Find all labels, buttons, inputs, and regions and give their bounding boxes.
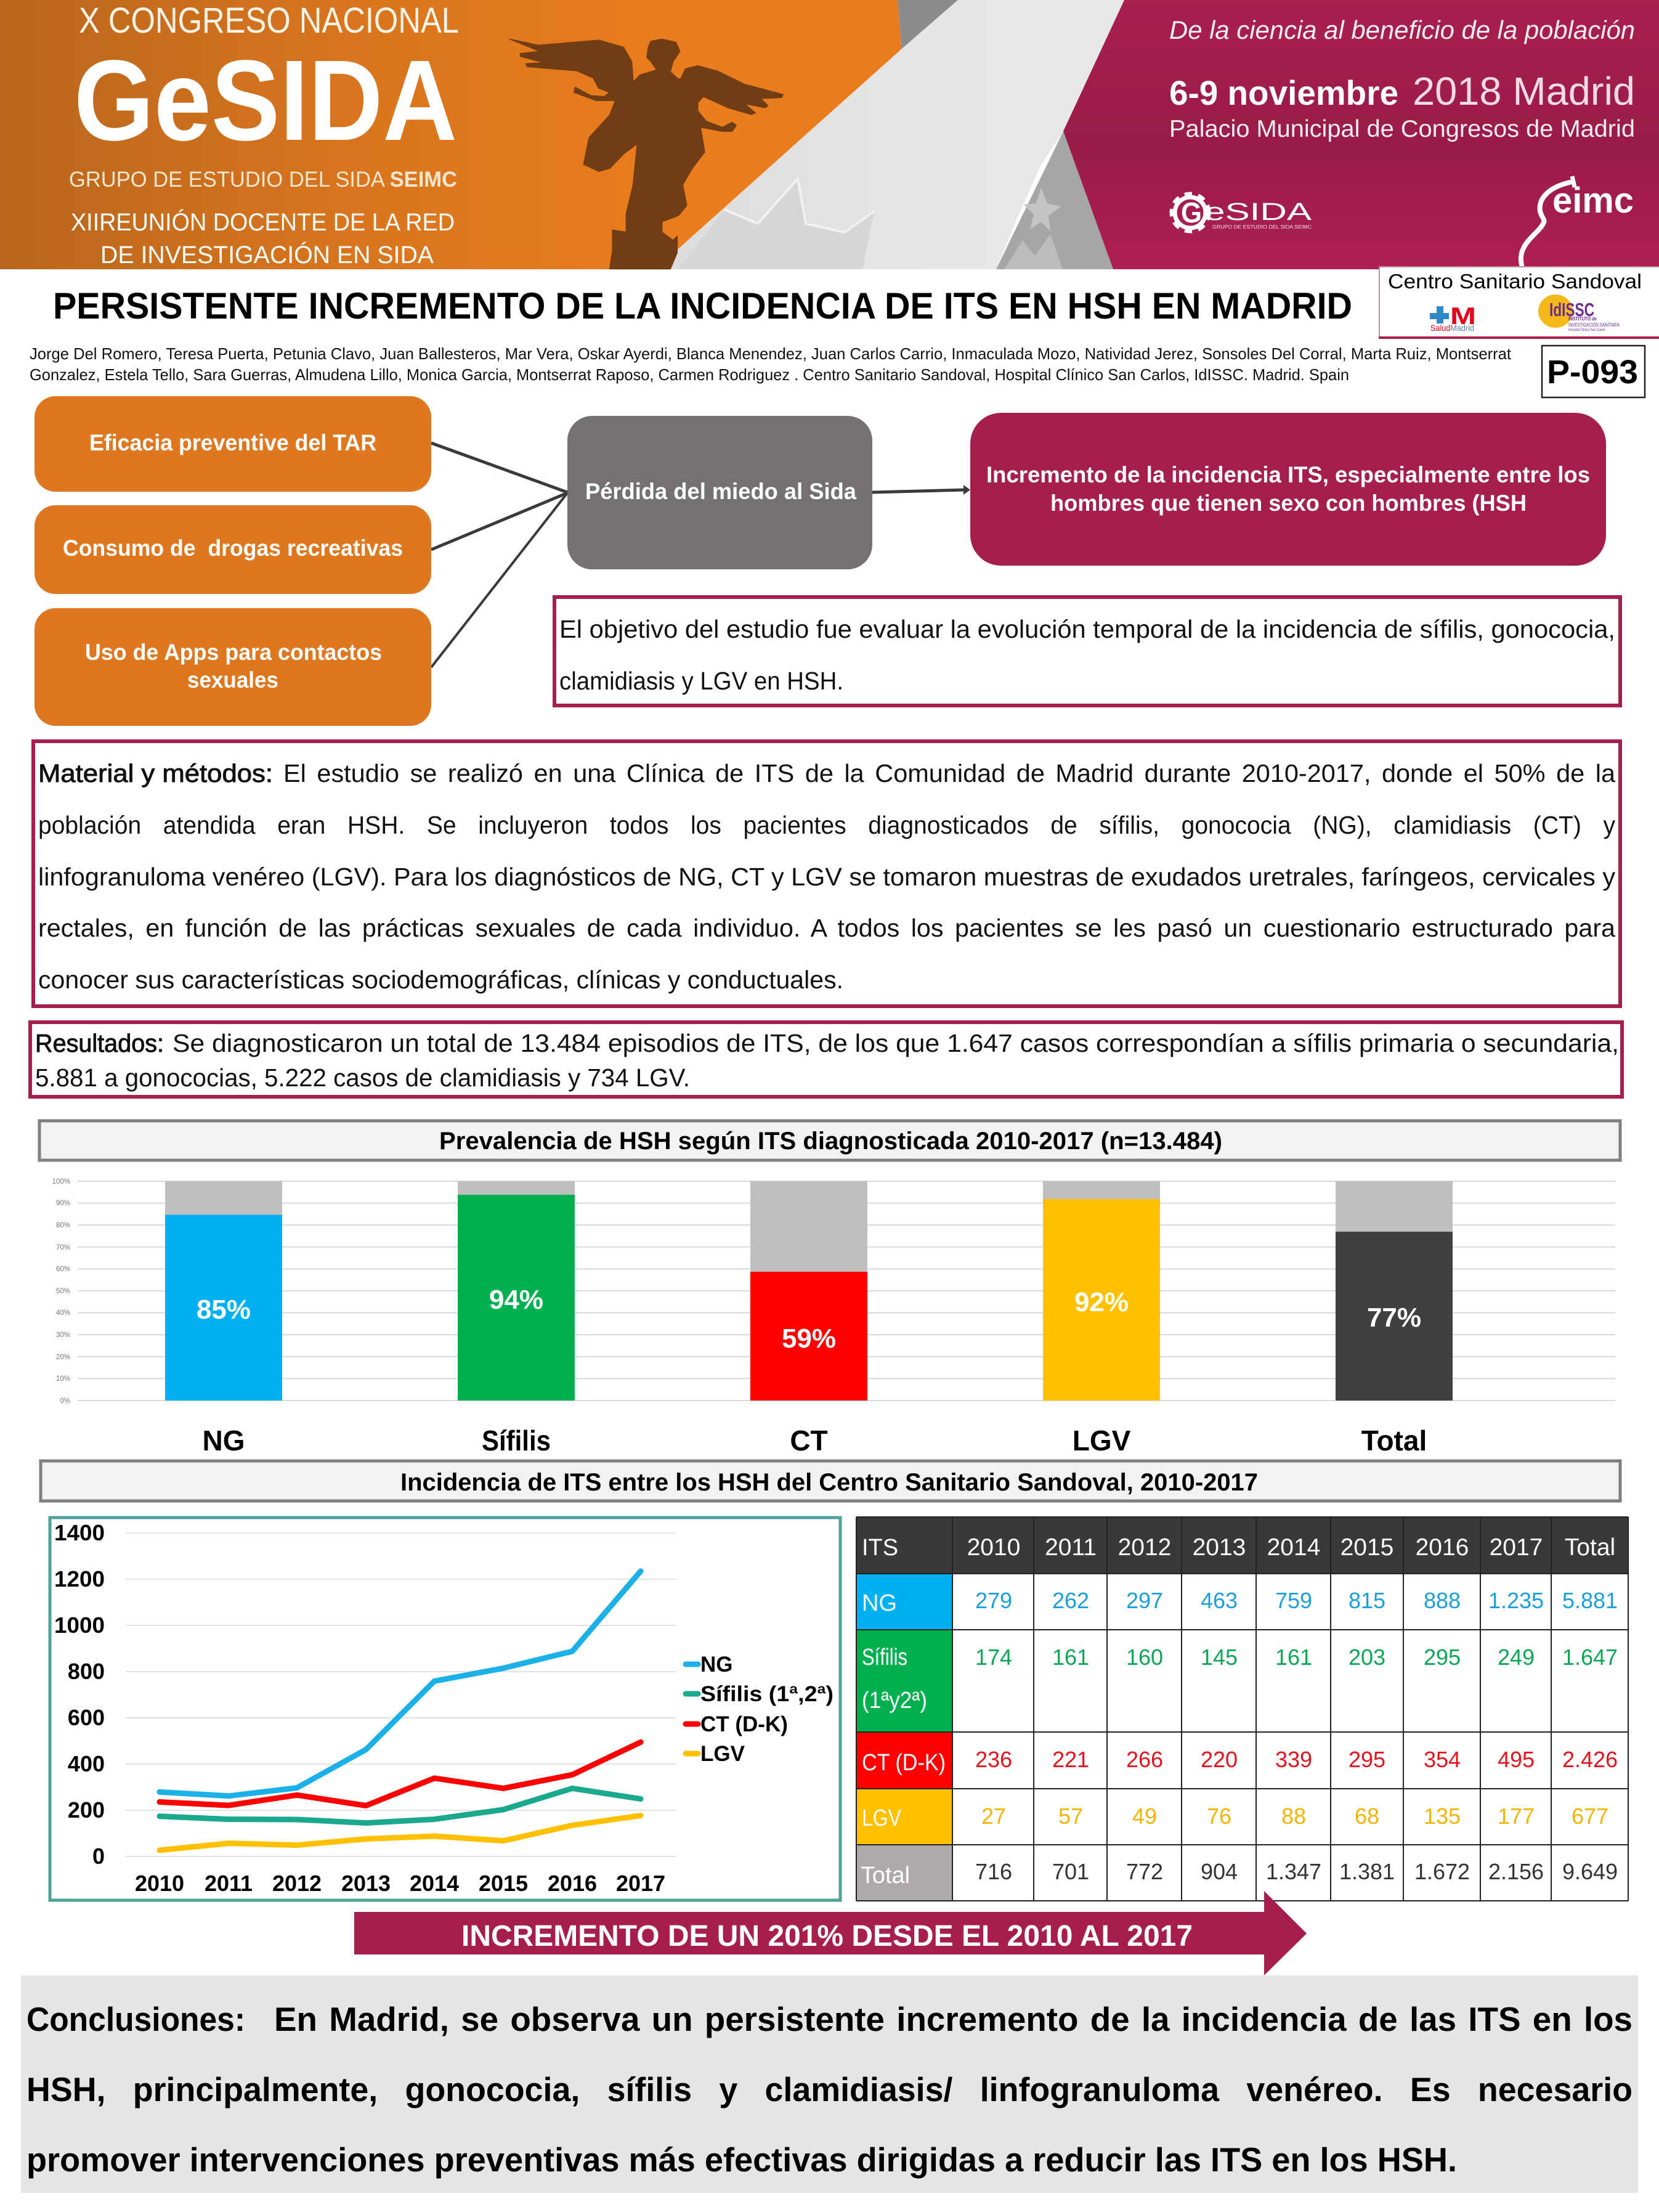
table row: CT [862,1747,1618,1776]
bar: CT: 59% [782,1324,836,1354]
table row: NG: 262 [1052,1588,1089,1613]
title: PERSISTENTE INCREMENTO DE LA INCIDENCIA DE ITS EN HSH EN MADRID [53,285,1352,327]
legend [686,1653,834,1766]
panel: conclusiones: En Madrid, se observa un persistente incremento de la incidencia de las ITS en los [274,2000,1633,2038]
table row: Total: 1.672 [1414,1859,1470,1884]
y axis labels: 80% [56,1222,70,1229]
table header row: ITS [862,1535,898,1561]
table header row: 2012 [1118,1534,1171,1561]
congress title text: GRUPO DE ESTUDIO DEL SIDA SEIMC [69,168,457,192]
angel statue silhouette [509,39,783,269]
table row: CT: 220 [1201,1747,1238,1772]
box: eficacia preventiva: Eficacia preventive del TAR [89,430,376,455]
authors: Jorge Del Romero, Teresa Puerta, Petunia Clavo, Juan Ballesteros, Mar Vera, Oskar Ayerdi, Blanca Menendez, Juan Carlos Carrio, Inmaculada Mozo, Natividad Jerez, Sonsoles Del Corral, Marta Ruiz, Montserrat [30,344,1512,363]
x axis labels: 2013 [341,1871,391,1896]
arrow: incremento 201% [354,1891,1307,1975]
heading: incidencia [41,1461,1620,1501]
legend: CT (D-K) [700,1712,788,1736]
bar: LGV: LGV [1073,1425,1131,1457]
poster number [1542,346,1645,397]
panel: objetivo: clamidiasis y LGV en HSH. [559,667,843,695]
logo: IdISSC: IdISSC [1549,299,1594,320]
table row: LGV: 677 [1572,1803,1608,1829]
table row: NG: 888 [1424,1588,1461,1613]
y axis labels: 60% [56,1266,70,1273]
table row: NG: 5.881 [1562,1588,1618,1613]
panel: conclusiones: Conclusiones: [26,2000,245,2038]
bar: NG: 85% [197,1295,251,1325]
box: uso de apps: Uso de Apps para contactos [85,640,382,665]
table row: Total: 904 [1201,1859,1238,1884]
panel: resultados: Se diagnosticaron un total de 13.484 episodios de ITS, de los que 1.647 casos correspondían a sífilis primaria o secundaria, [172,1029,1619,1057]
congress details text: 6-9 noviembre [1169,73,1398,112]
table row: NG: 759 [1275,1588,1312,1613]
table row: Total: Total [861,1863,910,1889]
logo: GeSIDA [1172,194,1312,231]
table row: Sifilis: 203 [1349,1645,1385,1670]
congress details text: Palacio Municipal de Congresos de Madrid [1169,116,1635,142]
congress title text: X CONGRESO NACIONAL [79,1,459,41]
table row: CT: 266 [1126,1747,1163,1772]
table row: Total: 701 [1052,1859,1089,1884]
logo: GeSIDA: G [1181,197,1202,229]
table row: NG: 463 [1201,1588,1238,1613]
y axis labels: 0% [60,1397,70,1405]
table row: Total: 716 [975,1859,1012,1884]
y axis labels: 0 [92,1844,105,1869]
bar chart: prevalencia [52,1178,1615,1457]
y axis labels: 20% [56,1354,70,1361]
logo: Salud Madrid: SaludMadrid [1430,323,1474,333]
congress title text [69,1,459,269]
bar: Total: 77% [1367,1303,1421,1333]
authors [30,344,1512,384]
y axis labels: 50% [56,1288,70,1295]
panel: material y metodos: El estudio se realizó en una Clínica de ITS de la Comunidad de Madrid durante 2010-2017, donde el 50% de la [283,759,1615,787]
panel: material y metodos: rectales, en función de las prácticas sexuales de cada individuo. A todos los pacientes se les pasó un cuestionario estructurado para [38,914,1615,942]
panel: conclusiones: promover intervenciones preventivas más efectivas dirigidas a reducir las ITS en los HSH. [26,2141,1457,2179]
table header row: 2015 [1341,1534,1393,1561]
table row: CT: CT (D-K) [862,1750,946,1776]
table row: Sifilis: 161 [1275,1645,1312,1670]
box: eficacia preventiva [34,396,431,492]
y axis labels: 1000 [54,1612,105,1638]
table row: CT: 2.426 [1562,1747,1618,1772]
box: incremento incidencia [970,413,1606,566]
table row: LGV: 27 [981,1803,1006,1829]
heading: prevalencia [39,1121,1620,1160]
congress title text: XIIREUNIÓN DOCENTE DE LA RED [71,208,455,236]
box: consumo de drogas [34,505,431,594]
table header row: 2010 [967,1534,1020,1561]
x axis labels: 2014 [410,1871,459,1896]
logo: IdISSC: Hospital Clínico San Carlos [1568,328,1605,332]
table row: Sifilis: 160 [1126,1645,1163,1670]
table header row [862,1534,1615,1561]
table header row: 2014 [1267,1534,1320,1561]
bar: Total [1336,1181,1453,1457]
authors: Gonzalez, Estela Tello, Sara Guerras, Almudena Lillo, Monica Garcia, Montserrat Raposo, Carmen Rodriguez . Centro Sanitario Sandoval, Hospital Clínico San Carlos, IdISSC. Madrid. Spain [30,365,1349,384]
table row: LGV: 135 [1424,1803,1461,1829]
table row: NG: NG [862,1590,897,1616]
table row: LGV: 177 [1498,1803,1535,1829]
y axis labels: 30% [56,1332,70,1339]
bar: Total: Total [1361,1425,1427,1457]
x axis labels: 2010 [135,1871,184,1896]
panel: material y metodos: población atendida eran HSH. Se incluyeron todos los pacientes diagnosticados de sífilis, gonococia (NG), clamidiasis (CT) y [38,811,1615,839]
congress title text: DE INVESTIGACIÓN EN SIDA [100,241,434,269]
table header row: 2011 [1045,1534,1097,1561]
panel: resultados: Resultados: [35,1029,164,1057]
heading: incidencia: Incidencia de ITS entre los HSH del Centro Sanitario Sandoval, 2010-2017 [400,1469,1258,1496]
bar: LGV: 92% [1074,1287,1129,1317]
y axis labels [54,1520,105,1869]
bar: NG: NG [202,1425,245,1457]
table header row: Total [1565,1534,1615,1561]
table row: LGV: 76 [1207,1803,1231,1829]
panel: material y metodos: Material y métodos: [38,759,273,787]
logo: IdISSC [1538,295,1620,332]
table row: NG: 279 [975,1588,1012,1613]
table header row: 2016 [1416,1534,1469,1561]
table row: LGV: 68 [1355,1803,1379,1829]
table row: LGV: LGV [862,1805,902,1831]
table row: Sifilis: 1.647 [1562,1645,1618,1670]
x axis labels [135,1871,665,1896]
table row: LGV: 49 [1132,1803,1157,1829]
table row: Sifilis [862,1645,1618,1714]
poster number: P-093 [1547,354,1638,391]
table row: Sifilis: (1ªy2ª) [862,1688,927,1714]
panel: material y metodos [33,741,1620,1006]
table header row: 2017 [1490,1534,1543,1561]
panel: material y metodos: conocer sus características sociodemográficas, clínicas y conductuales. [38,966,843,994]
logo: GeSIDA: eSIDA [1204,198,1312,226]
header banner [0,0,1659,269]
bar: Sifilis: Sífilis [482,1425,551,1457]
table row: CT: 295 [1349,1747,1385,1772]
table row: NG [862,1588,1618,1616]
table row: NG: 297 [1126,1588,1163,1613]
x axis labels: 2012 [272,1871,322,1896]
box: consumo de drogas: Consumo de drogas recreativas [63,535,403,561]
bar: CT: CT [790,1425,828,1457]
y axis labels: 400 [68,1751,105,1776]
table row: Sifilis: 249 [1498,1645,1535,1670]
congress details text [1169,15,1635,142]
table row: Total: 772 [1126,1859,1163,1884]
box: incremento incidencia: hombres que tienen sexo con hombres (HSH [1050,490,1527,516]
logo: Salud Madrid [1430,303,1476,333]
table row: Total: 1.347 [1266,1859,1321,1884]
bar: NG [165,1181,282,1457]
box: perdida del miedo: Pérdida del miedo al Sida [585,479,856,504]
logo: IdISSC: INSTITUTO de [1568,316,1597,322]
bar: Sifilis: 94% [489,1285,543,1315]
y axis labels: 10% [56,1375,70,1383]
table row: Total: 1.381 [1339,1859,1395,1884]
panel: centro sanitario logos: Centro Sanitario Sandoval [1388,270,1642,293]
logo: GeSIDA: GRUPO DE ESTUDIO DEL SIDA SEIMC [1212,224,1312,230]
table row: NG: 815 [1349,1588,1385,1613]
panel: material y metodos: linfogranuloma venéreo (LGV). Para los diagnósticos de NG, CT y LGV se tomaron muestras de exudados uretrales, faríngeos, cervicales y [38,863,1615,891]
box: uso de apps: sexuales [187,667,278,693]
panel: objetivo [554,597,1620,705]
x axis labels: 2015 [479,1871,528,1896]
table row: Sifilis: 174 [975,1645,1012,1670]
logo: seimc [1521,176,1634,265]
box: uso de apps [34,608,431,726]
table row: LGV: 57 [1058,1803,1083,1829]
series lines [160,1571,641,1850]
y axis labels: 200 [68,1797,105,1823]
connector lines to central box [431,443,567,667]
table row: NG: 1.235 [1488,1588,1544,1613]
table row: CT: 339 [1275,1747,1312,1772]
bar: CT [750,1181,867,1457]
box: incremento incidencia: Incremento de la incidencia ITS, especialmente entre los [986,462,1590,487]
panel: conclusiones [21,1975,1638,2193]
line chart: incidencia [50,1518,840,1900]
heading: prevalencia: Prevalencia de HSH según ITS diagnosticada 2010-2017 (n=13.484) [439,1128,1222,1155]
x axis labels: 2017 [616,1871,665,1896]
table header row: 2013 [1193,1534,1246,1561]
panel: conclusiones: HSH, principalmente, gonococia, sífilis y clamidiasis/ linfogranuloma venéreo. Es necesario [26,2070,1633,2108]
arrow to incidence box [872,485,970,495]
table row: Sifilis: 145 [1201,1645,1238,1670]
y axis labels: 90% [56,1200,70,1207]
y axis labels: 70% [56,1244,70,1251]
y axis labels: 100% [52,1178,70,1185]
legend: Sífilis (1ª,2ª) [700,1682,834,1706]
table row: Total: 2.156 [1488,1859,1544,1884]
bar: LGV [1043,1181,1160,1457]
table row: CT: 221 [1052,1747,1089,1772]
y axis labels: 1400 [54,1520,105,1545]
panel: resultados [30,1022,1622,1097]
logo: Salud Madrid: M [1450,303,1476,330]
panel: centro sanitario logos [1379,267,1659,339]
panel: resultados: 5.881 a gonococias, 5.222 casos de clamidiasis y 734 LGV. [35,1063,690,1092]
logo: IdISSC: INVESTIGACIÓN SANITARIA [1568,322,1620,328]
legend: LGV [700,1742,745,1766]
y axis labels [52,1178,70,1405]
y axis labels: 600 [68,1705,105,1730]
y axis labels: 800 [68,1659,105,1684]
table row: CT: 354 [1424,1747,1461,1772]
y axis labels: 40% [56,1309,70,1317]
legend: NG [700,1653,733,1677]
table row: CT: 495 [1498,1747,1535,1772]
x axis labels: 2016 [548,1871,597,1896]
table row: LGV: 88 [1281,1803,1306,1829]
bar: Sifilis [458,1181,575,1457]
congress title text: GeSIDA [74,37,457,165]
box: perdida del miedo [567,416,872,569]
table row: LGV [862,1803,1608,1831]
table: casos por ITS y año [856,1517,1628,1901]
table row: Sifilis: Sífilis [862,1645,907,1670]
table row: Sifilis: 295 [1424,1645,1461,1670]
x axis labels: 2011 [205,1871,253,1896]
arrow: incremento 201%: INCREMENTO DE UN 201% DESDE EL 2010 AL 2017 [461,1920,1193,1953]
table row: Total [861,1859,1618,1889]
y axis labels: 1200 [54,1566,105,1592]
congress details text: De la ciencia al beneficio de la población [1169,15,1635,44]
panel: objetivo: El objetivo del estudio fue evaluar la evolución temporal de la incidencia de sífilis, gonococia, [559,615,1615,643]
congress details text: 2018 Madrid [1413,69,1635,113]
table row: CT: 236 [975,1747,1012,1772]
table row: Sifilis: 161 [1052,1645,1089,1670]
table row: Total: 9.649 [1562,1859,1618,1884]
logo: seimc: eimc [1552,181,1634,221]
